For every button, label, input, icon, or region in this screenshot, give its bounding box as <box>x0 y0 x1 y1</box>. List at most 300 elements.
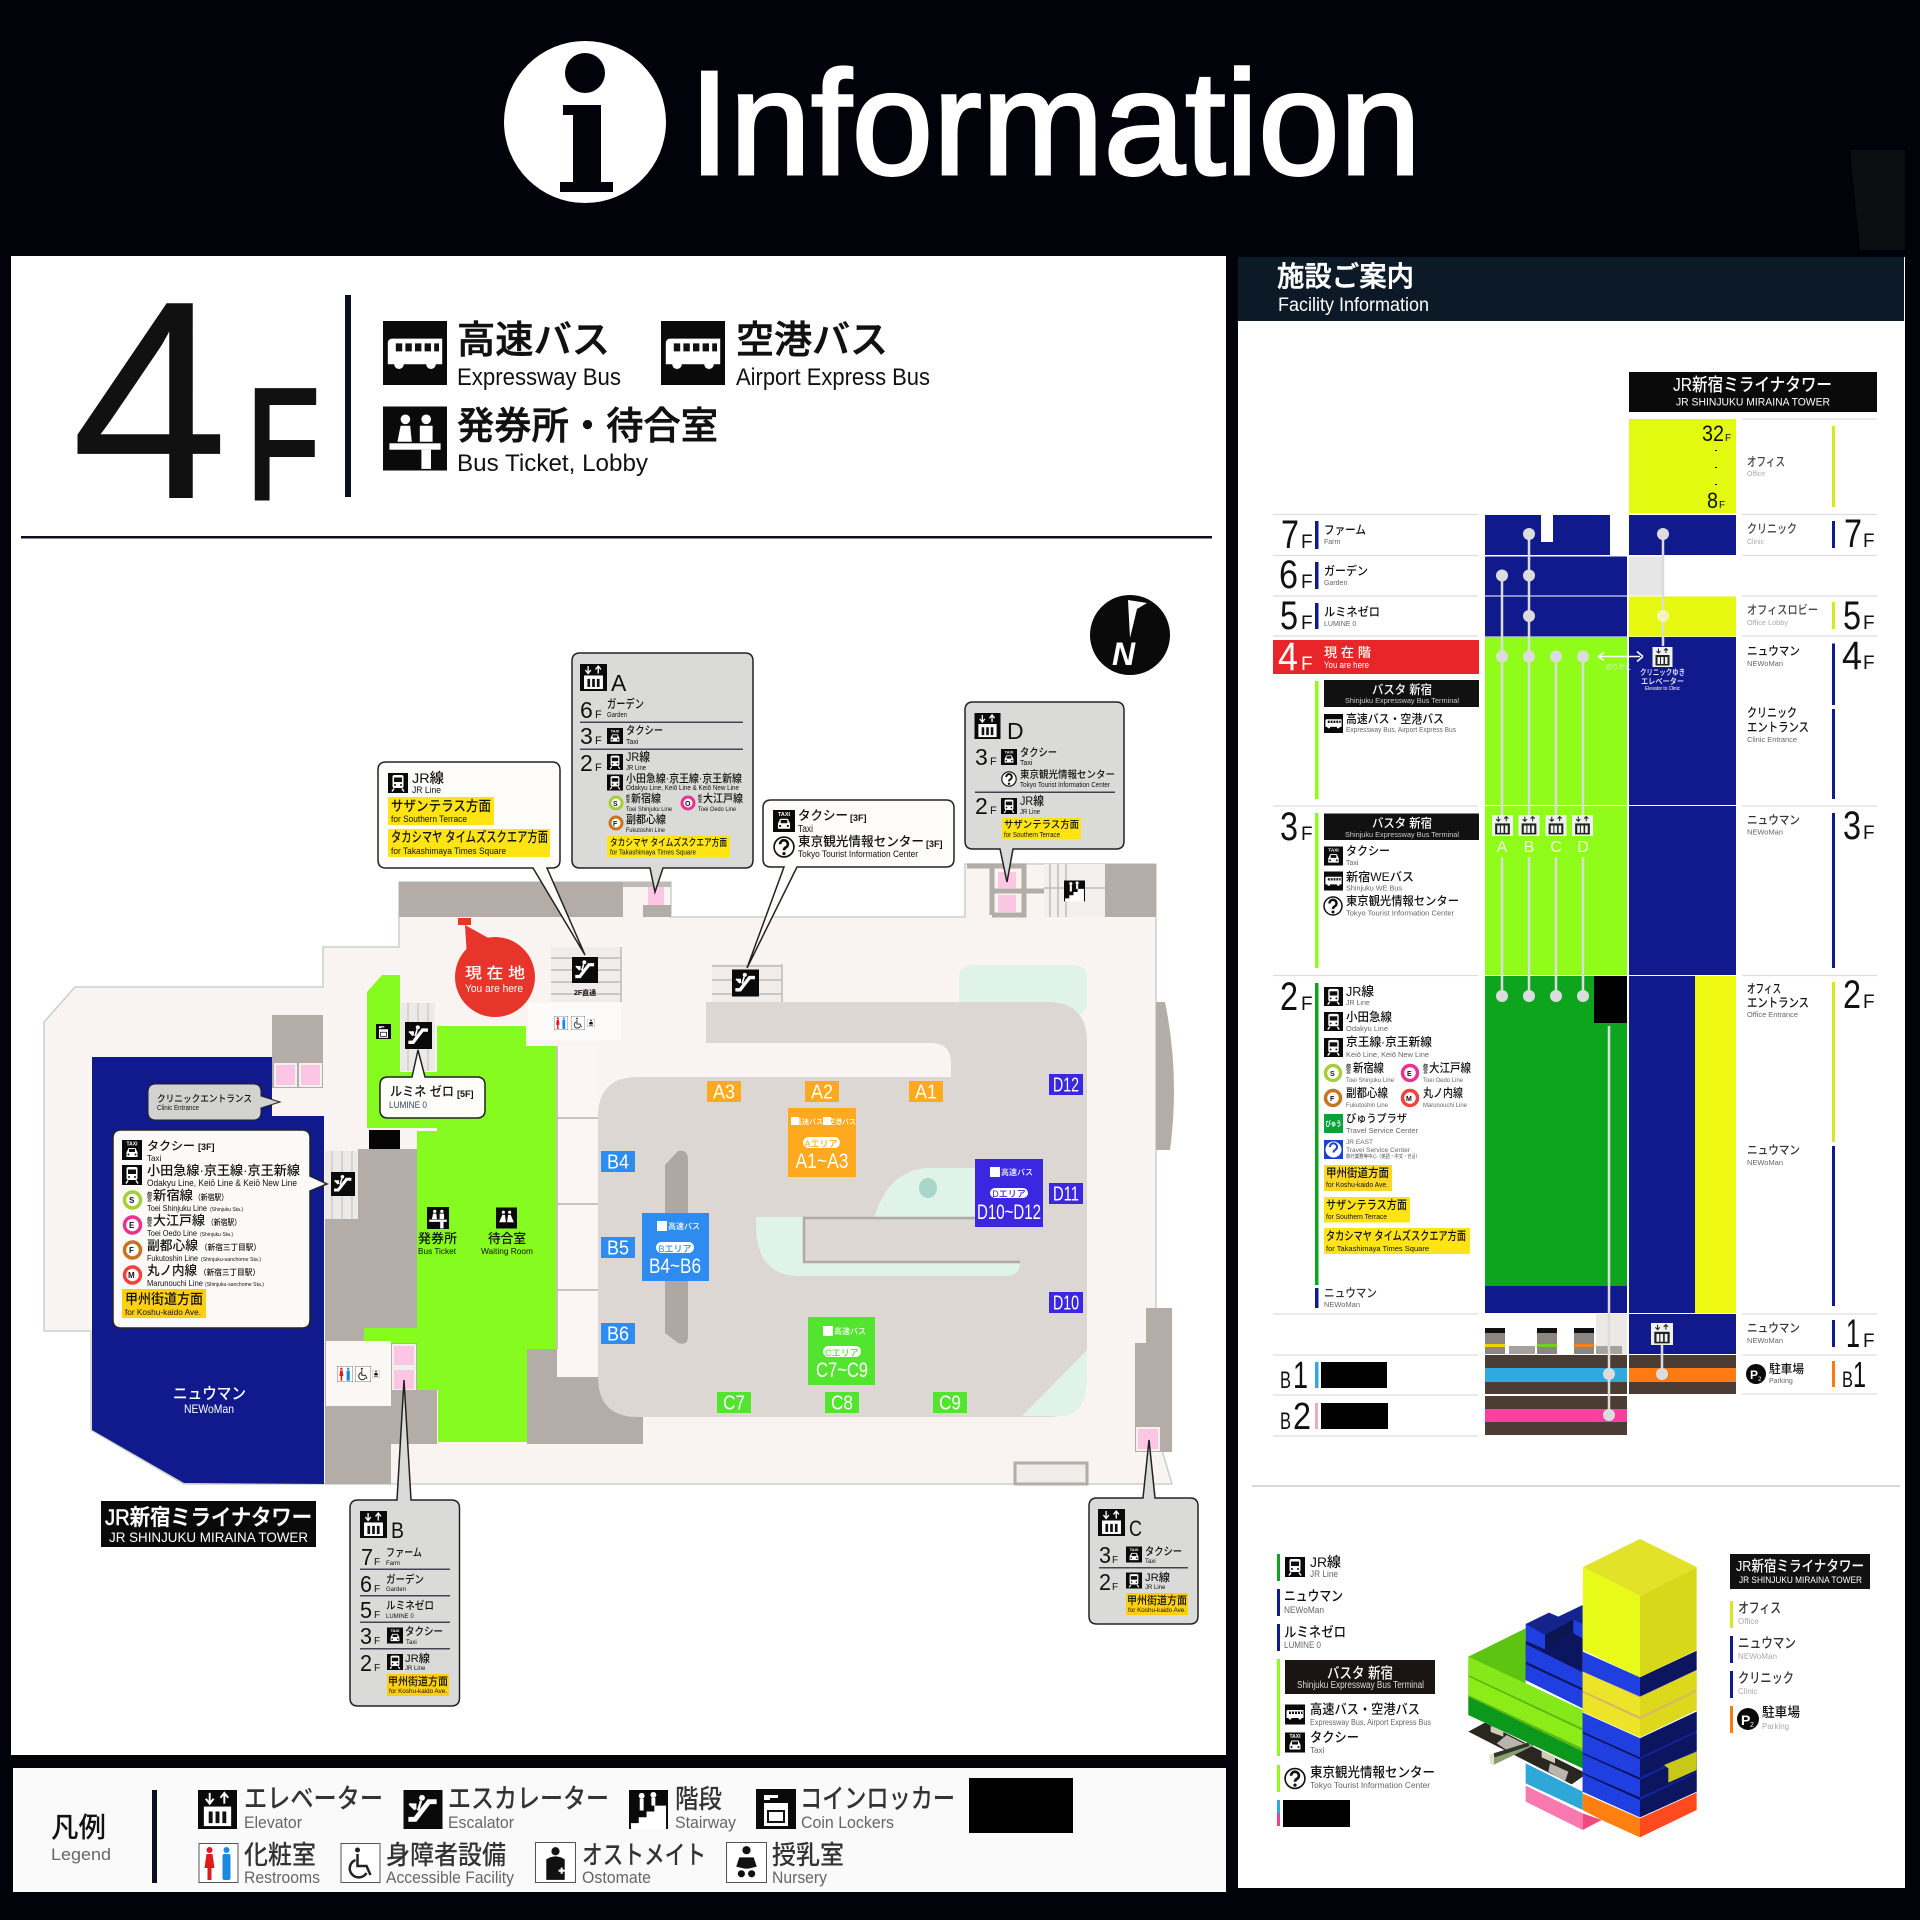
floor facilities: Expressway Bus <box>457 364 621 391</box>
floor labels right: Office Lobby <box>1747 620 1789 627</box>
callout: west escalator destinations: (Shinjuku Sta.) <box>210 1207 243 1213</box>
current floor bar: 現 在 階 <box>1324 645 1371 660</box>
floor labels left: 京王線·京王新線 <box>1346 1034 1432 1049</box>
isometric legend right: Clinic <box>1738 1687 1758 1696</box>
callout: JR line: for Southern Terrace <box>391 814 467 824</box>
isometric legend right: 2 <box>1750 1722 1754 1729</box>
floor labels left: Expressway Bus, Airport Express Bus <box>1346 727 1456 734</box>
callout: west escalator destinations: Fukutoshin Line <box>147 1254 198 1263</box>
floor labels left: 新宿WEバス <box>1346 869 1414 884</box>
callout: elevator C: 3 <box>1099 1542 1111 1568</box>
floor labels left: E <box>1407 1071 1412 1078</box>
current floor bar <box>1273 635 1479 679</box>
map labels: 発券所 <box>418 1231 457 1246</box>
floor labels left: JR Line <box>1346 1000 1370 1007</box>
isometric legend right: 駐車場 <box>1762 1704 1800 1720</box>
isometric legend left: 高速バス・空港バス <box>1310 1701 1420 1717</box>
callout: elevator B: F <box>374 1663 380 1674</box>
callout: elevator A: 都 <box>626 793 630 799</box>
floor labels left: Farm <box>1324 539 1340 546</box>
callout: elevator A: タカシマヤ タイムズスクエア方面 <box>610 836 727 849</box>
callout: elevator B: F <box>374 1636 380 1647</box>
area panel B <box>642 1213 709 1281</box>
area panel A: Aエリア <box>804 1139 838 1149</box>
floor labels left: Toei Shinjuku Line <box>1346 1077 1394 1084</box>
floor facilities: 高速バス <box>457 320 610 362</box>
callout: elevator A <box>572 653 753 892</box>
you are here marker <box>455 918 535 1017</box>
callout: elevator A: F <box>595 762 602 774</box>
floor labels right <box>1746 426 1875 1395</box>
callout: elevator B: Taxi <box>406 1640 417 1646</box>
floor labels left: F <box>1301 824 1313 845</box>
callout: elevator D: JR Line <box>1020 809 1040 816</box>
callout: JR line: タカシマヤ タイムズスクエア方面 <box>391 829 548 845</box>
callout: elevator B: Garden <box>386 1587 406 1593</box>
isometric legend right: Office <box>1738 1617 1759 1626</box>
tower title <box>1629 372 1877 412</box>
callout: elevator A: A <box>611 670 627 696</box>
callout: elevator A: ガーデン <box>607 696 644 711</box>
map icons <box>331 880 1085 1382</box>
floor labels left: 東京観光情報センター <box>1346 893 1459 908</box>
floor facilities: Bus Ticket, Lobby <box>457 450 648 477</box>
callout: elevator A: 6 <box>580 697 593 723</box>
floor labels right: NEWoMan <box>1747 1336 1783 1345</box>
legend items: 階段 <box>675 1784 722 1814</box>
callout: elevator A: Garden <box>607 712 627 719</box>
floor labels left: LUMINE 0 <box>1324 621 1356 628</box>
floor labels left: 都 <box>1423 1063 1428 1070</box>
elevator icons: A <box>1497 839 1508 856</box>
callout: elevator D: for Southern Terrace <box>1004 832 1060 839</box>
area panel B: Bエリア <box>658 1244 692 1254</box>
stall markers: A3 <box>713 1082 735 1104</box>
legend items: Escalator <box>448 1813 514 1832</box>
icon: information <box>504 41 666 203</box>
panel: facility information <box>1238 257 1905 1888</box>
callout: elevator A: Toei Shinjuku Line <box>626 806 672 813</box>
stall markers: C9 <box>939 1392 961 1414</box>
callout: west escalator destinations: 営 <box>147 1221 152 1228</box>
callout: west escalator destinations: （新宿駅） <box>207 1217 241 1227</box>
floor labels left: ファーム <box>1324 523 1366 537</box>
section diagram <box>1273 372 1877 1438</box>
map labels <box>173 1207 533 1416</box>
callout: west escalator destinations: 大江戸線 <box>153 1213 205 1228</box>
isometric legend right: NEWoMan <box>1738 1652 1777 1661</box>
legend items: Elevator <box>244 1813 302 1832</box>
floor labels left: for Takashimaya Times Square <box>1326 1244 1429 1253</box>
floor labels left: 3 <box>1280 805 1298 849</box>
callout: elevator A: Toei Oedo Line <box>698 806 736 813</box>
facility heading: 施設ご案内 <box>1277 261 1414 292</box>
floor labels left: 旅行業務等中心（英語・中文・한글） <box>1346 1153 1420 1160</box>
isometric legend left: Shinjuku Expressway Bus Terminal <box>1297 1680 1424 1691</box>
callout: elevator A: 営 <box>698 798 702 804</box>
floor labels left: F <box>1301 994 1313 1015</box>
callout: west escalator destinations: [3F] <box>198 1142 214 1152</box>
area panel A: 空港バス <box>828 1117 856 1126</box>
callout: west escalator destinations: 副都心線 <box>147 1238 198 1253</box>
legend items: 身障者設備 <box>386 1840 506 1870</box>
current floor bar: You are here <box>1324 660 1369 670</box>
isometric legend right: P <box>1741 1712 1750 1728</box>
floor labels right: NEWoMan <box>1747 659 1783 668</box>
callout: JR line: for Takashimaya Times Square <box>391 846 506 856</box>
stall markers: C8 <box>831 1392 853 1414</box>
floor labels left: 5 <box>1280 594 1298 638</box>
floor labels left: サザンテラス方面 <box>1326 1197 1407 1212</box>
isometric legend right: クリニック <box>1738 1670 1794 1686</box>
callout: elevator C: 2 <box>1099 1569 1111 1595</box>
legend heading: 凡例 <box>51 1812 106 1843</box>
elevator icons: F <box>1725 433 1731 444</box>
callout: elevator B: F <box>374 1557 380 1568</box>
legend items: Accessible Facility <box>386 1868 514 1887</box>
callout: elevator B <box>350 1380 460 1706</box>
map labels: NEWoMan <box>184 1402 234 1416</box>
callout: west escalator destinations: Marunouchi Line <box>147 1279 204 1288</box>
callout: west escalator destinations: （新宿駅） <box>194 1192 228 1202</box>
stall markers: D11 <box>1053 1184 1079 1206</box>
map icons: 2F直通 <box>574 988 596 997</box>
stall markers: D12 <box>1053 1074 1079 1096</box>
elevator icons: のりかえ <box>1606 663 1631 671</box>
map labels: ニュウマン <box>173 1385 246 1403</box>
floor facilities: 発券所・待合室 <box>457 406 718 448</box>
floor labels right: ニュウマン <box>1747 1143 1800 1157</box>
area panel D <box>975 1159 1043 1227</box>
floor labels left: Toei Oedo Line <box>1423 1077 1463 1084</box>
header band <box>0 0 1920 256</box>
floor labels left: 2 <box>1280 975 1298 1019</box>
callout: west escalator destinations: 営 <box>147 1196 152 1203</box>
callout: elevator B: for Koshu-kaido Ave. <box>389 1689 447 1695</box>
area panel C: Cエリア <box>825 1348 859 1358</box>
isometric legend left: 東京観光情報センター <box>1310 1764 1435 1780</box>
callout: elevator C: C <box>1129 1516 1142 1541</box>
callout: elevator A: 小田急線·京王線·京王新線 <box>626 771 742 785</box>
floor labels left: 副都心線 <box>1346 1085 1388 1100</box>
floor labels left: Shinjuku Expressway Bus Terminal <box>1345 830 1459 839</box>
floor labels right: F <box>1863 823 1875 844</box>
legend items: 化粧室 <box>244 1840 316 1870</box>
isometric legend left: ニュウマン <box>1284 1588 1343 1604</box>
floor labels right: ニュウマン <box>1747 644 1800 658</box>
elevator icons: 32 <box>1702 421 1724 446</box>
floor labels left: 7 <box>1281 513 1299 557</box>
isometric legend right: JR SHINJUKU MIRAINA TOWER <box>1739 1575 1862 1585</box>
callout: elevator A: 営 <box>626 798 630 804</box>
callout: elevator C: JR線 <box>1145 1570 1170 1584</box>
callout: elevator A: S <box>613 801 618 808</box>
callout: elevator D: F <box>990 756 997 768</box>
callout: elevator D: D <box>1007 718 1024 744</box>
legend items <box>198 1778 1073 1887</box>
floor labels left: 新宿線 <box>1353 1060 1384 1075</box>
callout: elevator B: ルミネゼロ <box>386 1598 434 1612</box>
callout: elevator B: LUMINE 0 <box>386 1614 414 1620</box>
floor labels right: F <box>1863 992 1875 1013</box>
callout: clinic entrance: Clinic Entrance <box>157 1105 199 1112</box>
callout: elevator B: F <box>374 1610 380 1621</box>
callout: elevator A: Fukutoshin Line <box>626 827 665 834</box>
map labels: Bus Ticket <box>418 1246 457 1256</box>
floor labels right: Parking <box>1769 1378 1793 1385</box>
callout: west escalator destinations: Taxi <box>147 1154 161 1163</box>
floor labels right: 3 <box>1843 804 1861 848</box>
floor labels right: NEWoMan <box>1747 828 1783 836</box>
floor labels left: for Southern Terrace <box>1326 1212 1387 1221</box>
callout: taxi and tourist info: 東京観光情報センター <box>798 834 924 849</box>
callout: Lumine: LUMINE 0 <box>389 1100 427 1110</box>
callout: west escalator destinations: （新宿三丁目駅） <box>200 1242 261 1252</box>
legend items: Stairway <box>675 1813 736 1832</box>
callout: JR line: JR Line <box>412 785 441 795</box>
area panel A: 高速バス <box>795 1117 823 1126</box>
floor labels left: JR線 <box>1346 984 1374 999</box>
callout: west escalator destinations: Toei Shinjuku Line <box>147 1204 208 1213</box>
current floor bar: F <box>1301 654 1313 675</box>
tower title: JR SHINJUKU MIRAINA TOWER <box>1676 396 1830 408</box>
floor labels left: Taxi <box>1346 860 1359 867</box>
icon: north compass <box>1090 595 1170 675</box>
area panel C: 高速バス <box>834 1326 866 1336</box>
callout: elevator B: 6 <box>360 1571 372 1597</box>
floor labels right: 駐車場 <box>1769 1361 1804 1376</box>
panel: floor map <box>11 242 1226 1755</box>
area panel D: Dエリア <box>992 1189 1026 1199</box>
floor number <box>71 242 319 558</box>
callout: elevator D: JR線 <box>1020 793 1044 808</box>
isometric legend left <box>1277 1554 1435 1827</box>
callout: west escalator destinations: M <box>128 1271 135 1280</box>
floor labels right: 1 <box>1853 1354 1866 1395</box>
callout: elevator C: F <box>1112 1582 1118 1593</box>
callout: elevator C: for Koshu-kaido Ave. <box>1128 1608 1186 1614</box>
callout: elevator B: 7 <box>361 1544 373 1570</box>
floor labels right: F <box>1863 613 1875 634</box>
callout: elevator A: 3 <box>580 723 593 749</box>
legend heading <box>51 1812 111 1864</box>
floor number: 4 <box>71 242 228 558</box>
stall markers <box>601 1074 1083 1414</box>
floor labels left: M <box>1406 1096 1412 1103</box>
isometric legend right: ニュウマン <box>1738 1635 1796 1651</box>
floor labels left: Shinjuku WE Bus <box>1346 886 1403 892</box>
floor labels right: オフィスロビー <box>1747 603 1818 617</box>
isometric building <box>1468 1539 1697 1837</box>
callout: elevator C: JR Line <box>1145 1585 1166 1591</box>
isometric legend left: バスタ 新宿 <box>1327 1665 1393 1682</box>
area panel A: A1~A3 <box>796 1150 848 1173</box>
callout: elevator C: F <box>1112 1555 1118 1566</box>
callout: elevator C: 甲州街道方面 <box>1127 1593 1187 1607</box>
callout: elevator D: Taxi <box>1020 760 1033 767</box>
panel: legend <box>13 1768 1226 1892</box>
floor labels right: 1 <box>1846 1312 1860 1356</box>
floor labels left: 甲州街道方面 <box>1326 1165 1389 1180</box>
callout: west escalator destinations: (Shinjuku Sta.) <box>200 1232 233 1238</box>
floor labels left: Keiō Line, Keiō New Line <box>1346 1052 1429 1059</box>
floor labels left: 1 <box>1293 1355 1308 1397</box>
callout: west escalator destinations: タクシー <box>147 1139 195 1153</box>
floor labels left: ニュウマン <box>1324 1286 1377 1300</box>
stall markers: A2 <box>811 1082 833 1104</box>
callout: elevator A: Odakyu Line, Keiō Line & Keiō New Line <box>626 785 739 792</box>
floor labels left: バスタ 新宿 <box>1372 682 1432 697</box>
floor labels right: 7 <box>1844 512 1862 556</box>
callout: elevator A: 都 <box>698 793 702 799</box>
callout: elevator A: 2 <box>580 750 593 776</box>
floor facilities: 空港バス <box>736 320 888 362</box>
tower label: JR新宿ミライナタワー <box>105 1505 312 1530</box>
floor facilities <box>383 320 930 477</box>
floor labels right: 5 <box>1843 594 1861 638</box>
callout: west escalator destinations: （新宿三丁目駅） <box>199 1267 260 1277</box>
you are here marker: You are here <box>465 983 523 995</box>
callout: elevator D: サザンテラス方面 <box>1004 818 1079 831</box>
elevator icons: 8 <box>1707 488 1718 513</box>
floor labels right: ニュウマン <box>1747 813 1800 827</box>
callout: elevator A: JR Line <box>626 765 646 772</box>
legend items: エスカレーター <box>448 1784 609 1814</box>
floor labels left: Garden <box>1324 580 1347 587</box>
floor facilities: Airport Express Bus <box>736 364 930 391</box>
floor labels left: 営 <box>1346 1068 1351 1075</box>
floor labels left <box>1273 513 1479 1438</box>
map labels: Waiting Room <box>481 1246 533 1256</box>
callout: taxi and tourist info: Taxi <box>798 824 813 835</box>
tower tiers <box>1583 1539 1697 1596</box>
floor labels left: 都 <box>1346 1063 1351 1070</box>
floor labels left: タカシマヤ タイムズスクエア方面 <box>1326 1228 1466 1243</box>
callout: elevator D: 東京観光情報センター <box>1020 768 1115 781</box>
callout: west escalator destinations: E <box>129 1221 135 1230</box>
elevator icons: エレベーター <box>1641 677 1684 686</box>
legend heading: Legend <box>51 1845 111 1864</box>
callout: elevator C: タクシー <box>1145 1545 1182 1558</box>
floor number: F <box>247 358 319 532</box>
legend items: エレベーター <box>244 1784 383 1814</box>
callout: elevator B: F <box>374 1584 380 1595</box>
floor labels left: Fukutoshin Line <box>1346 1102 1388 1109</box>
stall markers: B6 <box>607 1324 629 1346</box>
floor labels right: F <box>1863 653 1875 674</box>
trains <box>1485 1328 1622 1354</box>
callout: west escalator destinations <box>113 1130 327 1328</box>
floor labels left: びゅう <box>1326 1119 1342 1128</box>
floor labels left: Odakyu Line <box>1346 1026 1388 1033</box>
tower title: JR新宿ミライナタワー <box>1673 375 1832 395</box>
callout: elevator A: 新宿線 <box>631 791 661 805</box>
callout: elevator D: タクシー <box>1020 746 1057 759</box>
callout: taxi and tourist info: Tokyo Tourist Information Center <box>798 849 918 859</box>
callout: west escalator destinations: for Koshu-kaido Ave. <box>125 1307 201 1317</box>
tower label: JR SHINJUKU MIRAINA TOWER <box>109 1529 308 1545</box>
floor labels left: F <box>1330 1096 1335 1103</box>
legend items: 授乳室 <box>772 1840 844 1870</box>
callout: elevator A: F <box>613 821 618 828</box>
callout: elevator D <box>965 702 1124 882</box>
floor labels left: B <box>1280 1408 1291 1435</box>
area panel B: B4~B6 <box>649 1255 701 1278</box>
floor labels right: オフィス <box>1747 455 1785 469</box>
callout: elevator D: 2 <box>975 793 988 819</box>
legend items: Restrooms <box>244 1868 320 1887</box>
legend items: オストメイト <box>582 1840 706 1870</box>
callout: west escalator destinations: S <box>129 1196 135 1205</box>
area panel B: 高速バス <box>668 1221 700 1231</box>
floor labels left: Travel Service Center <box>1346 1147 1411 1154</box>
floor labels right: Office <box>1747 471 1765 478</box>
callout: west escalator destinations: Toei Oedo Line <box>147 1229 198 1238</box>
callout: elevator A: タクシー <box>626 724 663 737</box>
stall markers: C7 <box>723 1392 745 1414</box>
callout: west escalator destinations: 新宿線 <box>153 1188 193 1203</box>
callout: elevator B: JR線 <box>405 1651 430 1665</box>
elevator icons: B <box>1524 839 1534 856</box>
callout: clinic entrance <box>148 1084 280 1120</box>
floor labels left: F <box>1301 532 1313 553</box>
legend items: Coin Lockers <box>801 1813 894 1832</box>
floor labels left: ルミネゼロ <box>1324 604 1380 619</box>
icon: north compass: N <box>1112 636 1136 672</box>
callout: elevator B: 甲州街道方面 <box>388 1674 448 1688</box>
callout: elevator B: Farm <box>386 1561 400 1567</box>
callout: clinic entrance: クリニックエントランス <box>157 1094 252 1105</box>
callout: elevator C: Taxi <box>1145 1559 1156 1565</box>
floor labels left: びゅうプラザ <box>1346 1112 1407 1125</box>
callout: west escalator destinations: Odakyu Line, Keiō Line & Keiō New Line <box>147 1178 297 1188</box>
floor labels right: B <box>1842 1367 1853 1392</box>
callout: elevator D: Tokyo Tourist Information Center <box>1020 782 1111 789</box>
floor labels right: エントランス <box>1747 996 1809 1010</box>
callout: elevator B: 2 <box>360 1650 372 1676</box>
floor labels right: クリニック <box>1747 522 1797 536</box>
callout: JR line: JR線 <box>412 770 444 786</box>
callout: taxi and tourist info <box>747 800 954 968</box>
floor plan <box>44 864 1174 1484</box>
map labels: 待合室 <box>488 1231 526 1246</box>
isometric legend left: Taxi <box>1310 1746 1324 1755</box>
floor labels left: 大江戸線 <box>1429 1060 1471 1075</box>
callout: elevator A: F <box>595 735 602 747</box>
facility heading <box>1238 257 1904 321</box>
floor labels right: Clinic Entrance <box>1747 735 1797 744</box>
callout: elevator A: 大江戸線 <box>703 791 743 805</box>
elevator icons: F <box>1719 500 1725 511</box>
area panel D: 高速バス <box>1001 1167 1033 1177</box>
elevator icons <box>1492 421 1731 1345</box>
legend items: Ostomate <box>582 1868 651 1887</box>
callout: west escalator destinations: (Shinjuku-sanchome Sta.) <box>205 1282 264 1288</box>
isometric legend left: Tokyo Tourist Information Center <box>1310 1780 1430 1790</box>
floor labels left: Tokyo Tourist Information Center <box>1346 910 1455 918</box>
callout: elevator D: 3 <box>975 744 988 770</box>
elevator icons: D <box>1577 839 1589 856</box>
callout: elevator B: 3 <box>360 1623 372 1649</box>
current floor bar: 4 <box>1278 635 1298 679</box>
stall markers: B4 <box>607 1152 629 1174</box>
callout: elevator B: タクシー <box>405 1625 443 1638</box>
callout: west escalator destinations: 丸ノ内線 <box>147 1263 197 1278</box>
isometric legend left: JR Line <box>1310 1569 1338 1579</box>
callout: elevator B: 5 <box>360 1597 372 1623</box>
callout: taxi and tourist info: [3F] <box>926 839 942 849</box>
isometric legend right <box>1730 1554 1870 1733</box>
